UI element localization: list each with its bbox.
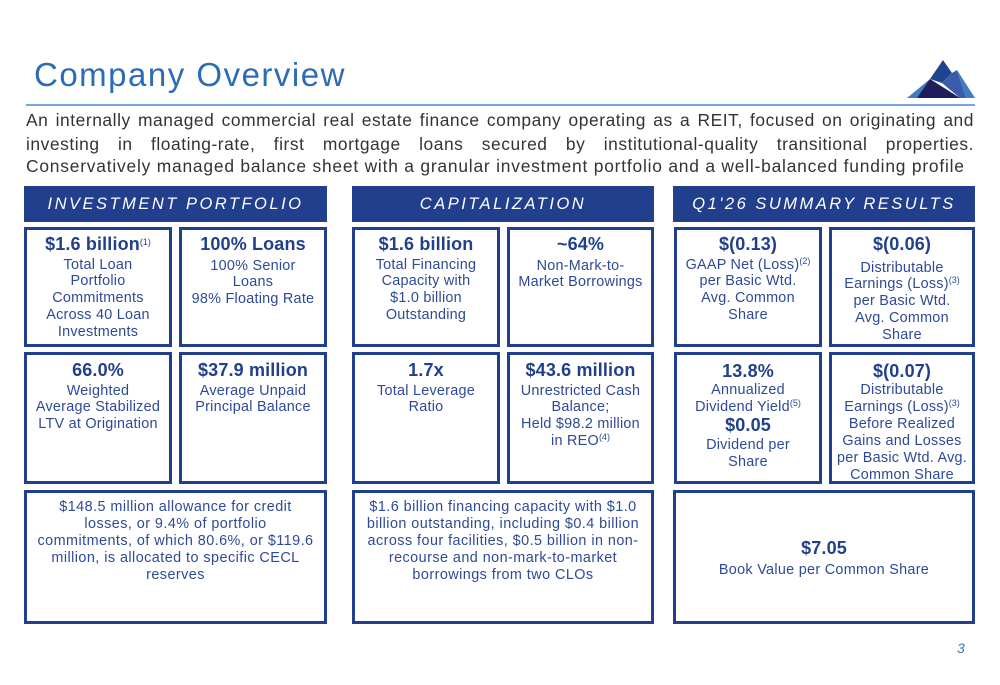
callout: credit loss allowance: reserves (146, 566, 205, 582)
intro text: An internally managed commercial real estate finance company operating as a REIT, focused on originating and (26, 110, 974, 130)
stat: unrestricted cash: $43.6 million (526, 360, 636, 380)
stat: LTV: 66.0% (72, 360, 124, 380)
heading: Q1'26 summary results (673, 186, 975, 222)
stat: unrestricted cash: in REO(4) (551, 432, 610, 449)
stat: distributable loss: Distributable (860, 260, 944, 276)
stat: distributable loss (829, 227, 975, 347)
stat: distributable loss: Earnings (Loss)(3) (844, 275, 960, 292)
stat: 100% loans: 100% Loans (200, 234, 306, 254)
stat: distributable loss before gains: per Basic Wtd. Avg. (837, 450, 967, 466)
callout: financing capacity (352, 490, 654, 624)
stat: GAAP net loss: per Basic Wtd. (699, 273, 797, 289)
stat: LTV: LTV at Origination (38, 416, 158, 432)
stat: total financing: Total Financing (376, 256, 476, 272)
stat: total financing: Outstanding (386, 307, 466, 323)
stat: total loan portfolio: Investments (58, 324, 138, 340)
callout: credit loss allowance: million, is allocated to specific CECL (51, 550, 300, 566)
stat: non-mark-to-market: Non-Mark-to- (537, 258, 624, 274)
stat: 100% loans: 98% Floating Rate (192, 291, 314, 307)
stat: distributable loss before gains: Common Share (850, 467, 954, 483)
stat: total financing: $1.6 billion (379, 234, 473, 254)
stat: GAAP net loss: Share (728, 307, 768, 323)
icon: mountain logo (907, 60, 975, 98)
stat: dividend yield: $0.05 (725, 415, 771, 435)
stat: GAAP net loss (674, 227, 822, 347)
stat: non-mark-to-market: ~64% (557, 234, 604, 254)
stat: distributable loss before gains (829, 352, 975, 484)
stat: book value (673, 490, 975, 624)
stat: total leverage: Ratio (409, 399, 443, 415)
stat: unrestricted cash (507, 352, 654, 484)
title: Company Overview (34, 56, 346, 93)
stat: GAAP net loss: Avg. Common (701, 290, 795, 306)
stat: dividend yield: Annualized (711, 382, 785, 398)
stat: average UPB: $37.9 million (198, 360, 308, 380)
stat: distributable loss: $(0.06) (873, 234, 931, 254)
stat: distributable loss before gains: Before Realized (849, 416, 955, 432)
stat: total leverage: 1.7x (408, 360, 444, 380)
stat: unrestricted cash: Unrestricted Cash (521, 382, 640, 398)
callout: financing capacity: $1.6 billion financing capacity with $1.0 (369, 498, 637, 514)
page number: 3 (957, 640, 965, 656)
stat: average UPB: Principal Balance (195, 399, 311, 415)
stat: distributable loss: Avg. Common (855, 310, 949, 326)
stat: total loan portfolio: Across 40 Loan (46, 307, 150, 323)
stat: total loan portfolio: $1.6 billion(1) (45, 234, 151, 254)
heading: investment portfolio: INVESTMENT PORTFOLIO (48, 195, 303, 213)
stat: dividend yield: 13.8% (722, 361, 774, 381)
stat: total financing (352, 227, 500, 347)
stat: unrestricted cash: Held $98.2 million (521, 416, 640, 432)
stat: total loan portfolio (24, 227, 172, 347)
callout: financing capacity: borrowings from two CLOs (412, 566, 594, 582)
stat: 100% loans (179, 227, 327, 347)
stat: GAAP net loss: $(0.13) (719, 234, 777, 254)
stat: total loan portfolio: Total Loan (64, 256, 132, 272)
callout: credit loss allowance: $148.5 million allowance for credit (59, 498, 292, 514)
stat: non-mark-to-market (507, 227, 654, 347)
stat: total leverage: Total Leverage (377, 382, 475, 398)
stat: dividend yield: Dividend Yield(5) Dividend per (695, 398, 801, 453)
stat: total loan portfolio: Portfolio (70, 273, 126, 289)
stat: distributable loss before gains: $(0.07) (873, 361, 931, 381)
stat: GAAP net loss: GAAP Net (Loss)(2) (686, 256, 810, 272)
stat: book value: Book Value per Common Share (719, 562, 929, 578)
stat: average UPB: Average Unpaid (200, 382, 306, 398)
stat: distributable loss before gains: Gains and Losses (842, 433, 962, 449)
header rule (26, 104, 975, 106)
heading: capitalization: CAPITALIZATION (420, 195, 586, 213)
stat: 100% loans: 100% Senior (210, 258, 296, 274)
stat: dividend yield (674, 352, 822, 484)
intro text: Conservatively managed balance sheet with a granular investment portfolio and a well-balanced funding profile (26, 156, 965, 176)
callout: financing capacity: across four facilities, $0.5 billion in non- (368, 532, 638, 548)
stat: 100% loans: Loans (233, 274, 273, 290)
heading: investment portfolio (24, 186, 327, 222)
stat: distributable loss: Share (882, 327, 922, 343)
callout: credit loss allowance (24, 490, 327, 624)
stat: LTV: Weighted (67, 382, 129, 398)
callout: credit loss allowance: losses, or 9.4% of portfolio (84, 516, 267, 532)
callout: financing capacity: recourse and non-mark-to-market (389, 550, 617, 566)
heading: Q1'26 summary results: Q1'26 SUMMARY RESULTS (692, 195, 956, 213)
stat: total loan portfolio: Commitments (52, 290, 144, 306)
stat: distributable loss before gains: Earnings (Loss)(3) (844, 398, 960, 415)
stat: total leverage (352, 352, 500, 484)
stat: average UPB (179, 352, 327, 484)
stat: total financing: Capacity with (382, 273, 470, 289)
intro text (26, 110, 974, 176)
stat: LTV (24, 352, 172, 484)
stat: unrestricted cash: Balance; (551, 399, 610, 415)
stat: distributable loss before gains: Distributable (860, 382, 944, 398)
stat: LTV: Average Stabilized (36, 399, 160, 415)
stat: distributable loss: per Basic Wtd. (853, 293, 951, 309)
stat: total financing: $1.0 billion (390, 290, 462, 306)
heading: capitalization (352, 186, 654, 222)
stat: book value: $7.05 (801, 538, 847, 558)
stat: dividend yield: Share (728, 454, 768, 470)
callout: financing capacity: billion outstanding, including $0.4 billion (367, 516, 639, 532)
stat: non-mark-to-market: Market Borrowings (518, 274, 643, 290)
callout: credit loss allowance: commitments, of which 80.6%, or $119.6 (38, 532, 313, 548)
intro text: investing in floating-rate, first mortgage loans secured by institutional-quality transitional properties. (26, 134, 974, 154)
